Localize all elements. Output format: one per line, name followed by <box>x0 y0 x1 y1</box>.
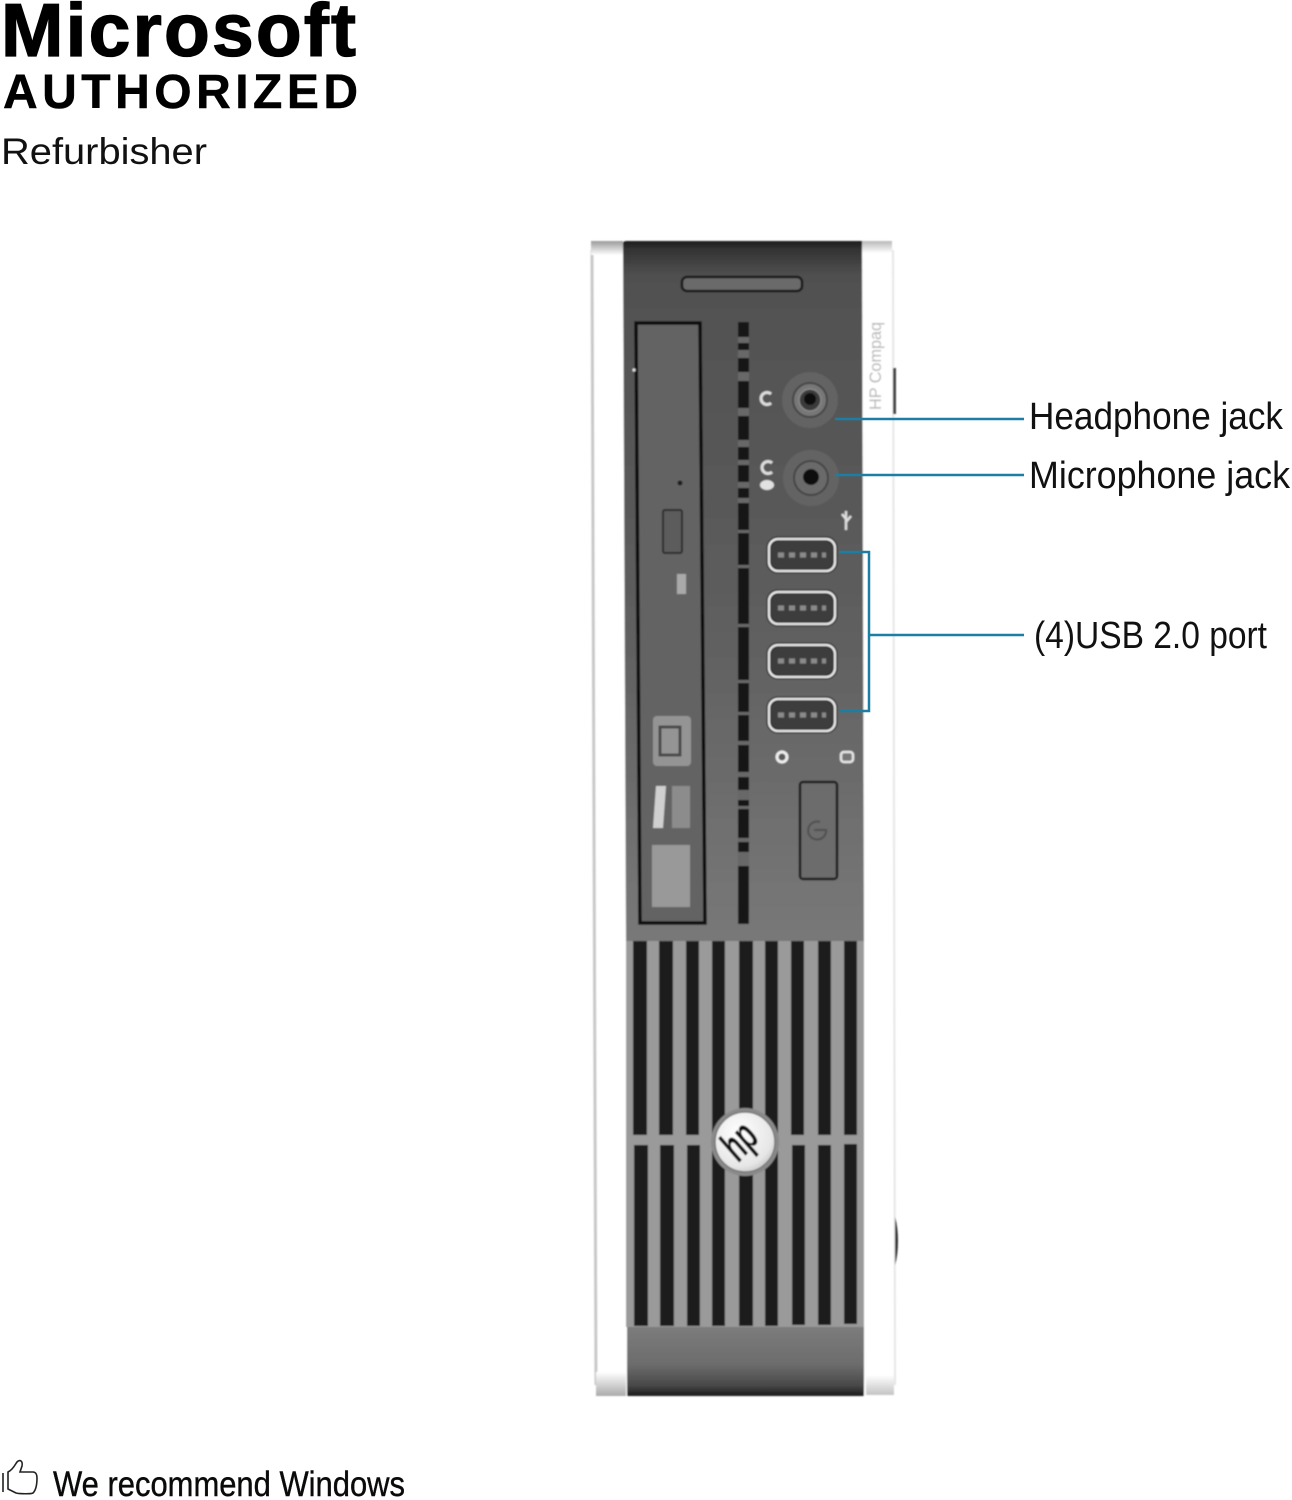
computer: front of HP desktop tower <box>591 241 898 1396</box>
optical drive <box>632 323 705 923</box>
top slot <box>682 277 802 291</box>
HP logo badge: hp <box>710 1112 769 1170</box>
heading: Microsoft Authorized Refurbisher <box>1 0 358 172</box>
dark front panel <box>623 241 864 941</box>
central perforated strip <box>738 322 749 924</box>
callout: USB ports bracket: (4)USB 2.0 port <box>1034 615 1267 657</box>
headphone jack <box>761 372 838 428</box>
callout: USB ports bracket <box>839 552 1267 711</box>
white side casing <box>591 241 898 1396</box>
heading: Microsoft Authorized Refurbisher: AUTHORIZED <box>3 66 358 119</box>
heading: Microsoft Authorized Refurbisher: Refurbisher <box>1 131 207 172</box>
vent background <box>626 941 864 1327</box>
status indicator icons <box>777 752 853 762</box>
vent slots <box>633 941 857 1326</box>
brand text on casing: HP Compaq <box>866 322 885 410</box>
icon: USB symbol <box>842 511 851 530</box>
USB ports <box>769 539 835 731</box>
microphone jack <box>760 450 839 506</box>
icon: thumbs up <box>3 1461 37 1494</box>
power button <box>800 782 837 879</box>
